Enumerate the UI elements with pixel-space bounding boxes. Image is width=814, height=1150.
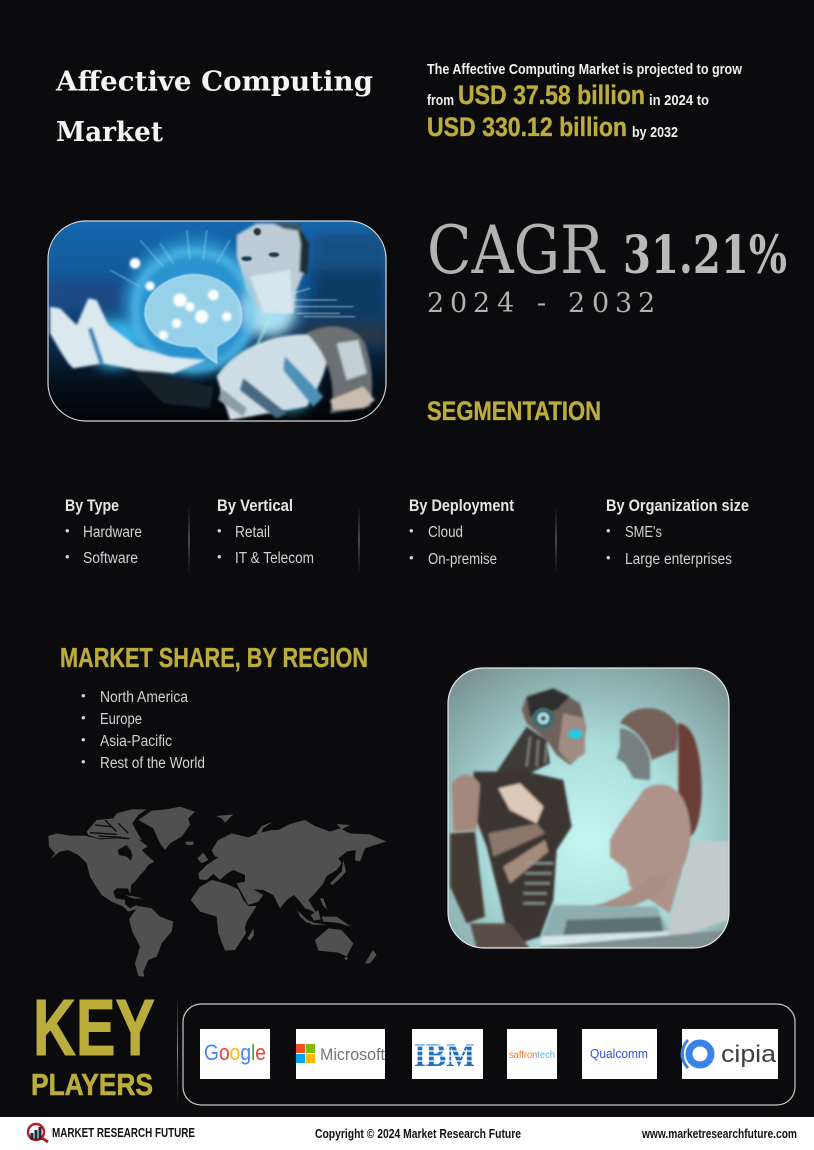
- segment: by type: By Type: [65, 496, 119, 515]
- title: Affective Computing: [55, 66, 373, 98]
- region list: Asia-Pacific: [100, 733, 172, 750]
- segment: by organization size: •: [606, 550, 611, 565]
- segment: by deployment: On-premise: [428, 551, 497, 568]
- logo: saffrontech: saffrontech: [509, 1049, 555, 1061]
- logo: IBM: [412, 1029, 483, 1079]
- segment: by vertical: •: [217, 523, 222, 538]
- footer: [0, 1117, 814, 1150]
- segment: by vertical: [217, 496, 314, 567]
- segment: by organization size: •: [606, 523, 611, 538]
- title: Market: [56, 117, 164, 148]
- footer: MARKET RESEARCH FUTURE: [52, 1126, 195, 1140]
- segment: by vertical: •: [217, 549, 222, 564]
- hands: [50, 298, 323, 418]
- region list: •: [81, 710, 86, 725]
- market share heading: MARKET SHARE, BY REGION: [60, 642, 368, 673]
- segment: by organization size: [606, 496, 749, 568]
- logo: cipia: [681, 1029, 778, 1079]
- market projection text: in 2024 to: [649, 92, 709, 109]
- segment: by type: Hardware: [83, 524, 142, 541]
- segment: by type: •: [65, 523, 70, 538]
- logo: Microsoft: [296, 1029, 385, 1079]
- segment: by vertical: Retail: [235, 524, 270, 541]
- region list: •: [81, 688, 86, 703]
- segment: by type: [65, 496, 142, 567]
- logo: Google: Google: [204, 1040, 266, 1065]
- segmentation heading: SEGMENTATION: [427, 396, 601, 426]
- market projection text: from: [427, 92, 454, 109]
- segment: by deployment: Cloud: [428, 524, 463, 541]
- logo: Microsoft: Microsoft: [320, 1045, 385, 1064]
- market projection text: by 2032: [632, 124, 678, 141]
- CAGR years: 2024 - 2032: [427, 288, 655, 319]
- robot head and torso: [217, 223, 375, 420]
- logo: IBM: IBM: [414, 1038, 475, 1074]
- icon: magnifier logo: [28, 1124, 48, 1142]
- robot: [450, 688, 586, 948]
- CAGR figure: CAGR: [427, 212, 606, 289]
- woman: [590, 706, 704, 914]
- region list: Rest of the World: [100, 755, 205, 772]
- photo: robot with holographic brain: [48, 221, 387, 421]
- segment: by organization size: SME's: [625, 524, 662, 541]
- segment: by deployment: [409, 496, 514, 568]
- segment: by type: •: [65, 549, 70, 564]
- market projection text: USD 330.12 billion: [427, 112, 627, 142]
- footer: Copyright © 2024 Market Research Future: [315, 1127, 521, 1141]
- logo: saffrontech: [507, 1029, 557, 1079]
- region list: •: [81, 754, 86, 769]
- logo: Qualcomm: [582, 1029, 657, 1079]
- region list: •: [81, 732, 86, 747]
- laptop: [540, 840, 728, 948]
- CAGR figure: [427, 212, 787, 289]
- segment: by vertical: IT & Telecom: [235, 550, 314, 567]
- logo: Qualcomm: Qualcomm: [590, 1047, 648, 1061]
- segment: by deployment: By Deployment: [409, 496, 514, 515]
- region list: Europe: [100, 711, 142, 728]
- logo: Google: [200, 1029, 270, 1079]
- photo: robot and woman at laptop: [448, 668, 729, 948]
- logo: cipia: cipia: [721, 1041, 777, 1068]
- brain hologram: [110, 230, 355, 368]
- segment: by deployment: •: [409, 523, 414, 538]
- segment: by vertical: By Vertical: [217, 496, 293, 515]
- world map: [48, 807, 387, 977]
- key players heading: KEY: [33, 983, 155, 1072]
- key players panel: [183, 1004, 795, 1105]
- segment: by organization size: Large enterprises: [625, 551, 732, 568]
- segment: by type: Software: [83, 550, 138, 567]
- segment: by organization size: By Organization size: [606, 496, 749, 515]
- region list: North America: [100, 689, 188, 706]
- market projection text: The Affective Computing Market is projected to grow: [427, 61, 742, 78]
- region list: [81, 688, 205, 772]
- segment: by deployment: •: [409, 550, 414, 565]
- market projection text: USD 37.58 billion: [458, 80, 645, 110]
- title: [55, 66, 373, 148]
- market projection text: [427, 61, 742, 142]
- key players heading: [31, 983, 155, 1102]
- key players heading: PLAYERS: [31, 1067, 153, 1102]
